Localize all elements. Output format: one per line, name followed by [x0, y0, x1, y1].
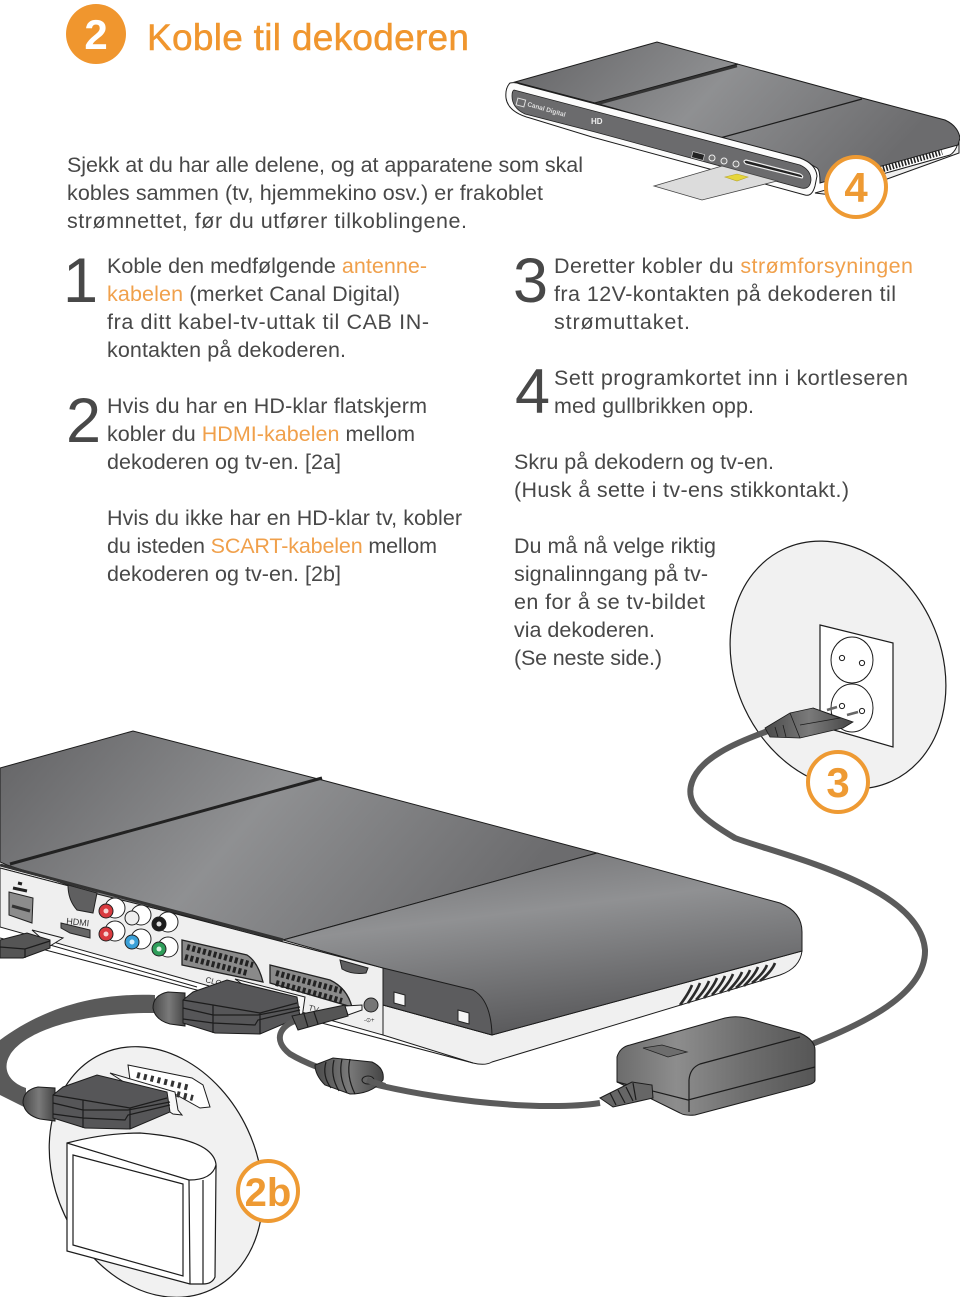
upper scart plug: [153, 979, 305, 1034]
step 1: 1: [63, 246, 98, 316]
tv: [67, 1133, 216, 1284]
step 4: med gullbrikken opp.: [554, 394, 754, 418]
step 3: fra 12V-kontakten på dekoderen til: [554, 282, 896, 306]
lower scart plug: [23, 1073, 182, 1129]
ethernet port: [9, 892, 33, 923]
badge 3: [808, 752, 868, 812]
hdmi plug: [0, 930, 63, 958]
wall outlet inset: [691, 505, 960, 825]
signal input note: (Se neste side.): [514, 646, 662, 670]
step 3: strømuttaket.: [554, 310, 690, 334]
power on note: [514, 450, 849, 502]
step 2: [66, 386, 462, 586]
gold chip: [725, 174, 748, 181]
power on note: Skru på dekodern og tv-en.: [514, 450, 774, 474]
step 2: dekoderen og tv-en. [2b]: [107, 562, 341, 586]
intro text: Sjekk at du har alle delene, og at apparatene som skal: [67, 153, 583, 177]
title badge: [66, 4, 126, 64]
strain relief: [600, 1082, 653, 1107]
badge 2b: 2b: [245, 1171, 291, 1215]
step 2: kobler du HDMI-kabelen mellom: [107, 422, 415, 446]
top surface left and centre: [0, 731, 597, 940]
plug pins: [827, 707, 858, 715]
top surface: [515, 42, 960, 183]
program card: [654, 166, 777, 200]
badge 4: [826, 157, 886, 217]
small notch: [340, 960, 368, 974]
power on note: (Husk å sette i tv-ens stikkontakt.): [514, 478, 849, 502]
power cord: [690, 731, 925, 1044]
step 3: 3: [513, 246, 548, 316]
intro text: strømnettet, før du utfører tilkoblingene.: [67, 209, 467, 233]
step 1: Koble den medfølgende antenne-: [107, 254, 427, 278]
ferrite bead: [315, 1058, 385, 1094]
power plug: [765, 708, 853, 738]
step 2: 2: [66, 386, 101, 456]
step 2: dekoderen og tv-en. [2a]: [107, 450, 341, 474]
decoder front illustration: HD: [591, 117, 603, 126]
dc socket: [364, 998, 378, 1012]
white underside and vent: [815, 136, 959, 196]
step 2: Hvis du ikke har en HD-klar tv, kobler: [107, 506, 462, 530]
step 1: kabelen (merket Canal Digital): [107, 282, 400, 306]
decoder rear illustration: [0, 731, 802, 1064]
side vent slots: [680, 963, 775, 1005]
front bezel: [506, 83, 817, 195]
decoder rear illustration: HDMI: [66, 916, 90, 928]
step 4: [515, 357, 908, 427]
hdmi scart tv inset: [10, 1011, 302, 1297]
signal input note: en for å se tv-bildet: [514, 590, 705, 614]
notch: [68, 885, 97, 913]
decoder rear illustration: CLOUD: [204, 975, 234, 991]
scart socket upper: [182, 940, 263, 982]
dc jack: [292, 1005, 362, 1030]
signal input note: Du må nå velge riktig: [514, 534, 716, 558]
rca connectors: [105, 898, 125, 918]
white base: [0, 868, 802, 1064]
badge 2b: [238, 1161, 298, 1221]
white rear squares: [394, 992, 405, 1006]
tv scart socket: [128, 1065, 210, 1108]
step 4: 4: [515, 357, 550, 427]
power adapter: [600, 1017, 815, 1115]
signal input note: [514, 534, 716, 670]
vent slots: [880, 152, 942, 170]
step 1: kontakten på dekoderen.: [107, 338, 346, 362]
card slot: [744, 160, 803, 178]
title badge: 2: [84, 11, 108, 58]
intro text: kobles sammen (tv, hjemmekino osv.) er frakoblet: [67, 181, 543, 205]
outlet plate: [820, 625, 893, 747]
adapter seams: [617, 1037, 815, 1112]
step 2: du isteden SCART-kabelen mellom: [107, 534, 437, 558]
signal input note: via dekoderen.: [514, 618, 655, 642]
decoder front illustration: [506, 42, 960, 200]
intro text: [67, 153, 583, 233]
dc cable: [280, 1020, 600, 1106]
step 2: Hvis du har en HD-klar flatskjerm: [107, 394, 427, 418]
step 1: fra ditt kabel-tv-uttak til CAB IN-: [107, 310, 429, 334]
top surface right: [283, 853, 802, 1035]
badge 4: 4: [844, 164, 868, 211]
scart socket lower: [270, 965, 352, 1007]
decoder rear illustration: -⊙+: [364, 1018, 375, 1024]
step 3: Deretter kobler du strømforsyningen: [554, 254, 913, 278]
step 1: [63, 246, 429, 362]
step 4: Sett programkortet inn i kortleseren: [554, 366, 908, 390]
thick scart cable: [0, 995, 155, 1108]
hdmi port: [61, 923, 90, 938]
title: Koble til dekoderen: [147, 17, 469, 58]
badge 3: 3: [826, 759, 850, 806]
step 3: [513, 246, 913, 334]
usb port and indicator lights: [691, 152, 705, 160]
logo text: Canal Digital: [526, 101, 566, 119]
signal input note: signalinngang på tv-: [514, 562, 708, 586]
decoder rear illustration: TV: [307, 1003, 320, 1015]
dark rear panel: [383, 968, 492, 1035]
